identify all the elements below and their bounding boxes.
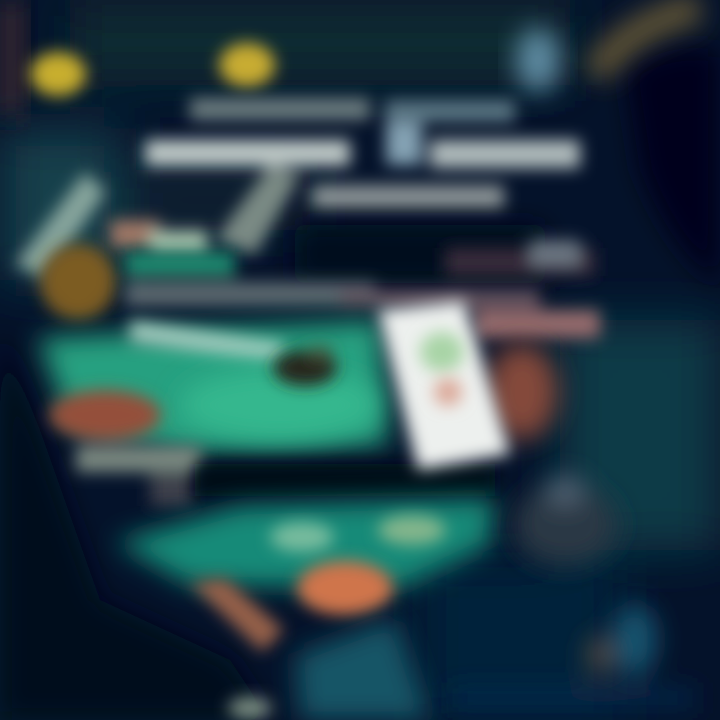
gold coin (40, 244, 116, 320)
yellow lights (30, 43, 275, 96)
cards on lower table (270, 515, 446, 552)
left foreground shadow (0, 370, 250, 718)
hand holding phone (486, 344, 558, 440)
blue light top right (516, 28, 560, 92)
phone screen chart (420, 332, 464, 372)
dark band between tables (195, 464, 495, 496)
lower hand (190, 561, 393, 652)
bottom right glow (450, 604, 695, 706)
red edge top left (0, 0, 22, 115)
right figure silhouette (625, 48, 720, 285)
phone (378, 300, 510, 470)
light green patch (180, 369, 380, 441)
phone body (378, 300, 510, 470)
card fan left (15, 172, 208, 278)
dark block under headline (295, 225, 545, 283)
watch on wrist (513, 476, 617, 565)
hair highlight (595, 8, 700, 75)
blurred headline (145, 98, 580, 255)
bottom highlight (228, 697, 272, 719)
lower green table (115, 498, 495, 588)
upper green table (38, 320, 388, 452)
table highlight (130, 320, 285, 362)
chips on table (273, 346, 337, 386)
middle strip (125, 240, 600, 338)
phone screen accent (434, 378, 462, 406)
left hand (49, 390, 201, 506)
sleeve (295, 618, 430, 720)
